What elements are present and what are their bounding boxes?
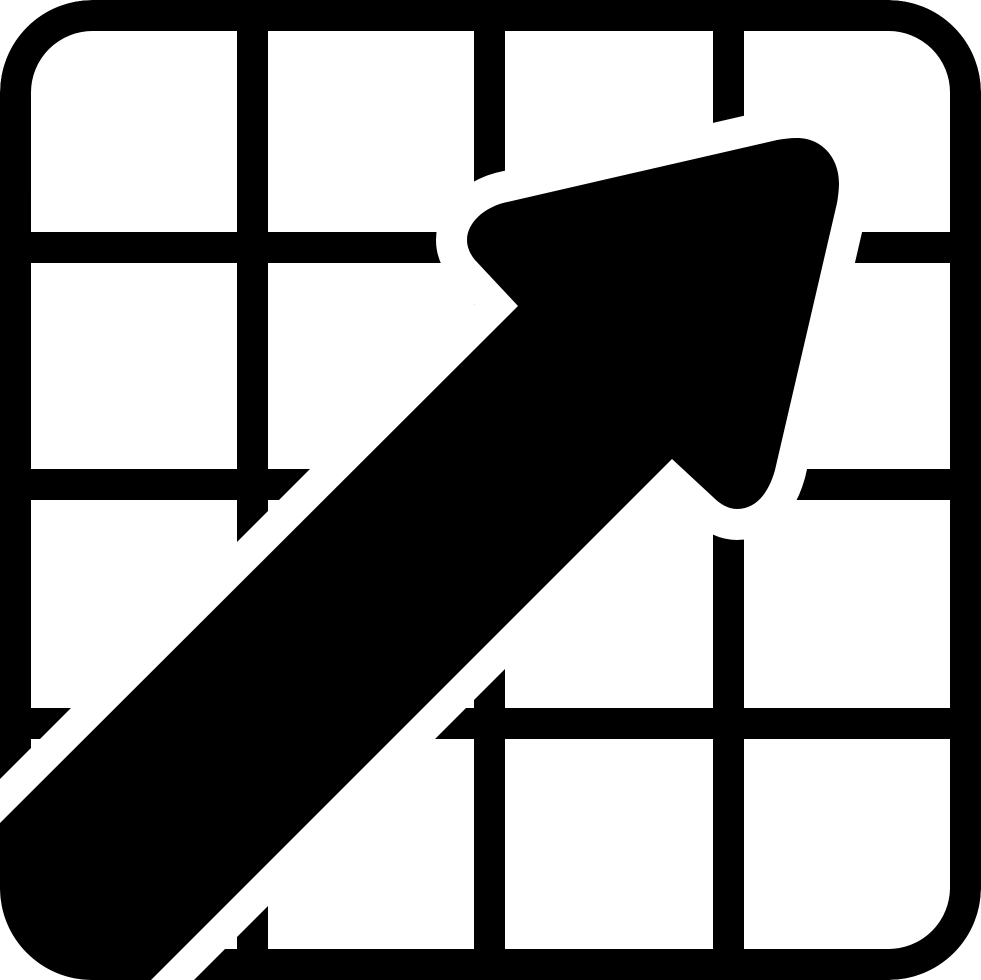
rising arrow (0, 138, 839, 980)
arrow head halo (467, 138, 839, 509)
arrow shaft halo (0, 279, 694, 980)
